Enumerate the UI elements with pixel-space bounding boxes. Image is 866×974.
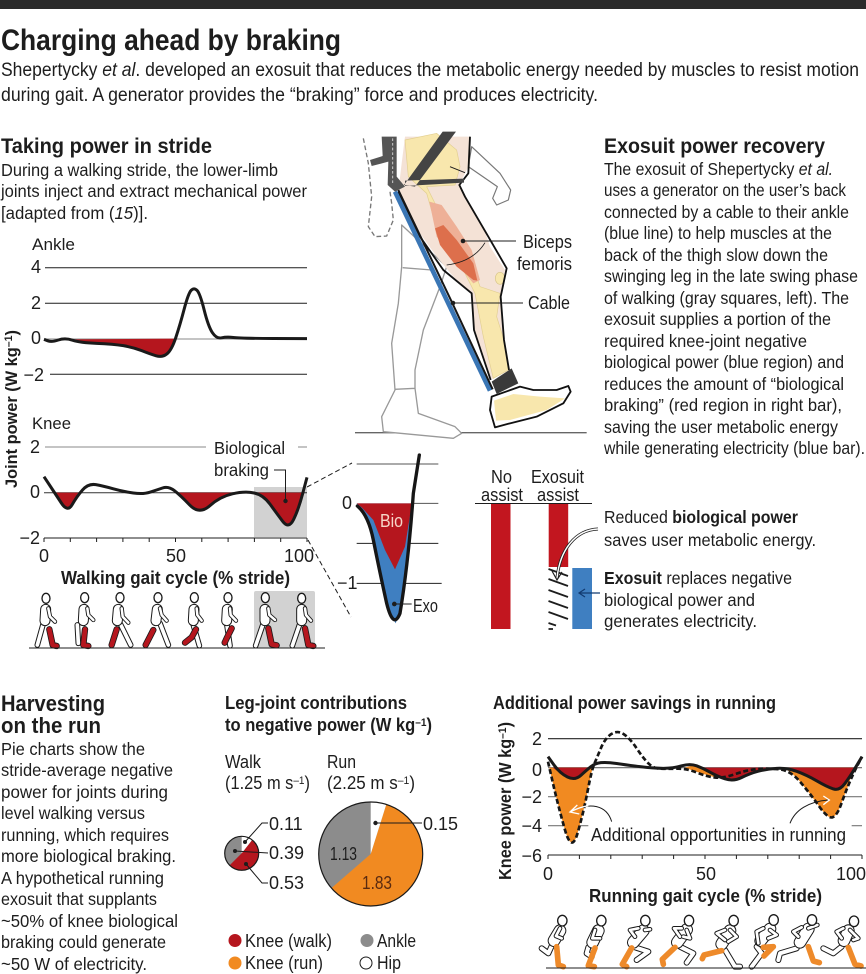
label: biceps femoris: femoris [517, 254, 572, 274]
label background [588, 825, 852, 845]
panel: exosuit power recovery text: of walking (gray squares, left). The [604, 288, 849, 308]
bar: exosuit generator [572, 568, 592, 629]
pie: run: 1.83 [362, 873, 392, 893]
chart: running knee power [521, 729, 866, 884]
chart: knee power [19, 414, 314, 566]
axis [548, 855, 862, 859]
bar annotation text: Reduced biological power [604, 507, 798, 527]
bar annotation text: generates electricity. [604, 611, 757, 631]
solid curve walking [548, 757, 862, 789]
pie: run: Run [327, 752, 356, 772]
legend [228, 931, 416, 973]
bar annotation text: biological power and [604, 590, 755, 610]
arrow: exosuit [579, 589, 600, 597]
pie: walk: (1.25 m s [225, 773, 300, 793]
legend: Hip [377, 953, 401, 973]
chart: knee power: 50 [166, 546, 186, 566]
panel: harvesting on the run text: ~50 W of electricity. [1, 954, 147, 974]
panel: exosuit power recovery text: saving the user metabolic energy [604, 417, 838, 437]
chart: running knee power: 2 [532, 729, 542, 749]
heading: leg-joint contributions: to negative power (W kg [225, 715, 432, 735]
y axis label: joint power: ) [2, 330, 21, 335]
pie: run: 0.15 [423, 814, 458, 834]
pie: walk: 0.39 [269, 843, 304, 863]
chart: knee power: Knee [32, 414, 71, 433]
pie: walk: Walk [225, 752, 262, 772]
panel: taking power in stride text: joints inject and extract mechanical power [0, 181, 307, 201]
panel: harvesting on the run text: Pie charts show the [1, 739, 145, 759]
walking figures [29, 591, 325, 648]
front leg skin [398, 137, 510, 380]
chart: running knee power: 100 [836, 864, 866, 884]
chart: inset knee power: Bio [380, 511, 403, 531]
muscle leader [447, 243, 485, 265]
label: biceps femoris [461, 232, 572, 274]
bar: exosuit assist biological [549, 504, 568, 567]
bar: no assist [491, 504, 510, 629]
chart: bars [475, 467, 592, 629]
heading: leg-joint contributions: ) [426, 715, 432, 735]
panel: exosuit power recovery text: braking” (red region in right bar), [604, 395, 842, 415]
chart: ankle power: 4 [31, 257, 41, 277]
panel: exosuit power recovery text: required knee-joint negative [604, 331, 807, 351]
intro text: during gait. A generator provides the “braking” force and produces electricity. [1, 84, 598, 106]
panel: harvesting on the run text: A hypothetical running [1, 868, 164, 888]
chart: running knee power: −4 [521, 816, 542, 836]
top bar [0, 0, 866, 9]
pie: walk: 0.11 [269, 814, 303, 834]
pie: run: ) [409, 773, 415, 793]
arrow: reduced power [552, 529, 598, 580]
chart: running knee power: −2 [521, 787, 542, 807]
panel: exosuit power recovery text: Exosuit power recovery [604, 135, 825, 158]
pie: run: –1 [398, 775, 409, 787]
panel: taking power in stride text: During a walking stride, the lower-limb [1, 160, 278, 180]
chart: running knee power: −6 [521, 846, 542, 866]
ground line [355, 431, 587, 435]
panel: exosuit power recovery text: exosuit supplies a portion of the [604, 309, 831, 329]
chart: bars: assist [537, 485, 579, 505]
panel: exosuit power recovery text: back of the thigh slow down the [604, 245, 828, 265]
y axis label: joint power: –1 [3, 335, 15, 347]
panel: exosuit power recovery text: biological power (blue region) and [604, 352, 844, 372]
y axis label: knee power: Knee power (W kg [495, 728, 515, 880]
y axis label: knee power: ) [495, 722, 515, 727]
chart: ankle power: 0 [31, 328, 41, 348]
panel: harvesting on the run text: stride-average negative [1, 760, 173, 780]
chart: running knee power: 0 [532, 760, 542, 780]
dashed rear arm [363, 138, 393, 237]
panel: harvesting on the run text: running, which requires [1, 825, 169, 845]
legend: Knee (walk) [245, 931, 332, 951]
panel: harvesting on the run text: exosuit that supplants [1, 889, 157, 909]
intro text [1, 59, 859, 106]
bar annotation text: saves user metabolic energy. [604, 530, 816, 550]
callout: biological braking [214, 438, 288, 503]
chart: ankle power [23, 235, 307, 385]
y axis label: knee power: –1 [497, 727, 509, 739]
chart: knee power: 2 [30, 437, 40, 457]
right arrow [790, 796, 829, 823]
pie: run: 1.13 [330, 844, 357, 864]
title: Charging ahead by braking [1, 24, 341, 57]
chart: inset knee power: 0 [342, 493, 352, 513]
cable blue [395, 192, 490, 391]
rear leg [382, 225, 462, 438]
shoe [490, 386, 571, 427]
hatching [548, 569, 568, 629]
panel: harvesting on the run text: Harvesting [1, 691, 105, 716]
heading: leg-joint contributions [225, 693, 432, 735]
heading: leg-joint contributions: Leg-joint contributions [225, 693, 407, 713]
front arm [468, 147, 511, 205]
chart: ankle power: Ankle [32, 235, 75, 254]
chart: knee power: −2 [19, 528, 40, 548]
chart: running knee power: 0 [543, 864, 553, 884]
panel: exosuit power recovery text [603, 135, 865, 458]
panel: harvesting on the run text: on the run [1, 713, 101, 738]
panel: exosuit power recovery text: The exosuit of Shepertycky et al. [604, 159, 833, 179]
panel: exosuit power recovery text: reduces the amount of “biological [604, 374, 844, 394]
left arrow [570, 805, 612, 822]
x axis [44, 538, 307, 542]
pie: run [319, 752, 458, 906]
x axis title: running gait cycle: Running gait cycle (% stride) [589, 885, 822, 906]
heading: additional power savings: Additional power savings in running [493, 692, 776, 713]
x axis title: walking gait cycle: Walking gait cycle (% stride) [61, 567, 290, 588]
panel: taking power in stride text [0, 135, 307, 223]
red walking regions [553, 768, 854, 789]
biceps femoris [435, 225, 477, 281]
chart: ankle power: −2 [23, 365, 44, 385]
pie: walk: ) [305, 773, 310, 793]
label: biceps femoris: Biceps [523, 232, 572, 252]
heading: leg-joint contributions: –1 [415, 717, 426, 729]
pie: walk: 0.53 [269, 873, 304, 893]
running figures [542, 915, 866, 968]
chart: bars: assist [481, 485, 523, 505]
bones [405, 133, 508, 378]
chart: ankle power: 2 [31, 293, 41, 313]
gray highlight: late swing [254, 487, 307, 537]
foot bones [494, 394, 565, 421]
label: cable: Cable [528, 293, 570, 313]
panel: harvesting on the run text: more biological braking. [1, 846, 176, 866]
panel: harvesting on the run text: power for joints during [1, 782, 168, 802]
bar annotation text: Exosuit replaces negative [604, 568, 792, 588]
chart: running knee power: 50 [696, 864, 716, 884]
chart: knee power: 0 [30, 482, 40, 502]
label: cable [451, 293, 570, 313]
chart: bars: No [491, 467, 512, 487]
panel: harvesting on the run text: ~50% of knee biological [1, 911, 178, 931]
panel: taking power in stride text: Taking power in stride [1, 135, 212, 158]
legend: Ankle [377, 931, 416, 951]
waist harness [404, 132, 464, 187]
legend: Knee (run) [245, 953, 323, 973]
panel: taking power in stride text: [adapted from (15)]. [1, 203, 148, 223]
chart: knee power: 100 [284, 546, 314, 566]
dashed zoom lines [307, 463, 352, 617]
front leg outline [398, 137, 509, 380]
ankle strap [492, 368, 518, 394]
pie: walk [225, 752, 310, 893]
callout: biological braking: braking [214, 460, 269, 480]
chart: inset knee power: Exo [413, 596, 438, 616]
y axis label: joint power: Joint power (W kg [2, 342, 21, 488]
panel: harvesting on the run text: braking could generate [1, 932, 166, 952]
chart: inset knee power: −1 [337, 573, 358, 593]
panel: exosuit power recovery text: (blue line) to help muscles at the [604, 223, 832, 243]
panel: harvesting on the run text [1, 691, 178, 974]
dashed curve running [548, 732, 862, 843]
panel: harvesting on the run text: level walking versus [1, 803, 145, 823]
callout: biological braking: Biological [214, 438, 285, 458]
hamstring muscles [429, 202, 480, 283]
illustration: leg with exosuit [355, 132, 587, 438]
chart: inset knee power [337, 455, 442, 623]
pie: walk: –1 [293, 775, 305, 787]
chart: knee power: 0 [39, 546, 49, 566]
label: additional opportunities: Additional opportunities in running [591, 824, 846, 845]
knee cap [495, 272, 505, 284]
orange opportunity regions [549, 765, 853, 843]
bar annotation text [604, 507, 816, 631]
chart: bars: Exosuit [531, 467, 584, 487]
pie: run: (2.25 m s [327, 773, 402, 793]
